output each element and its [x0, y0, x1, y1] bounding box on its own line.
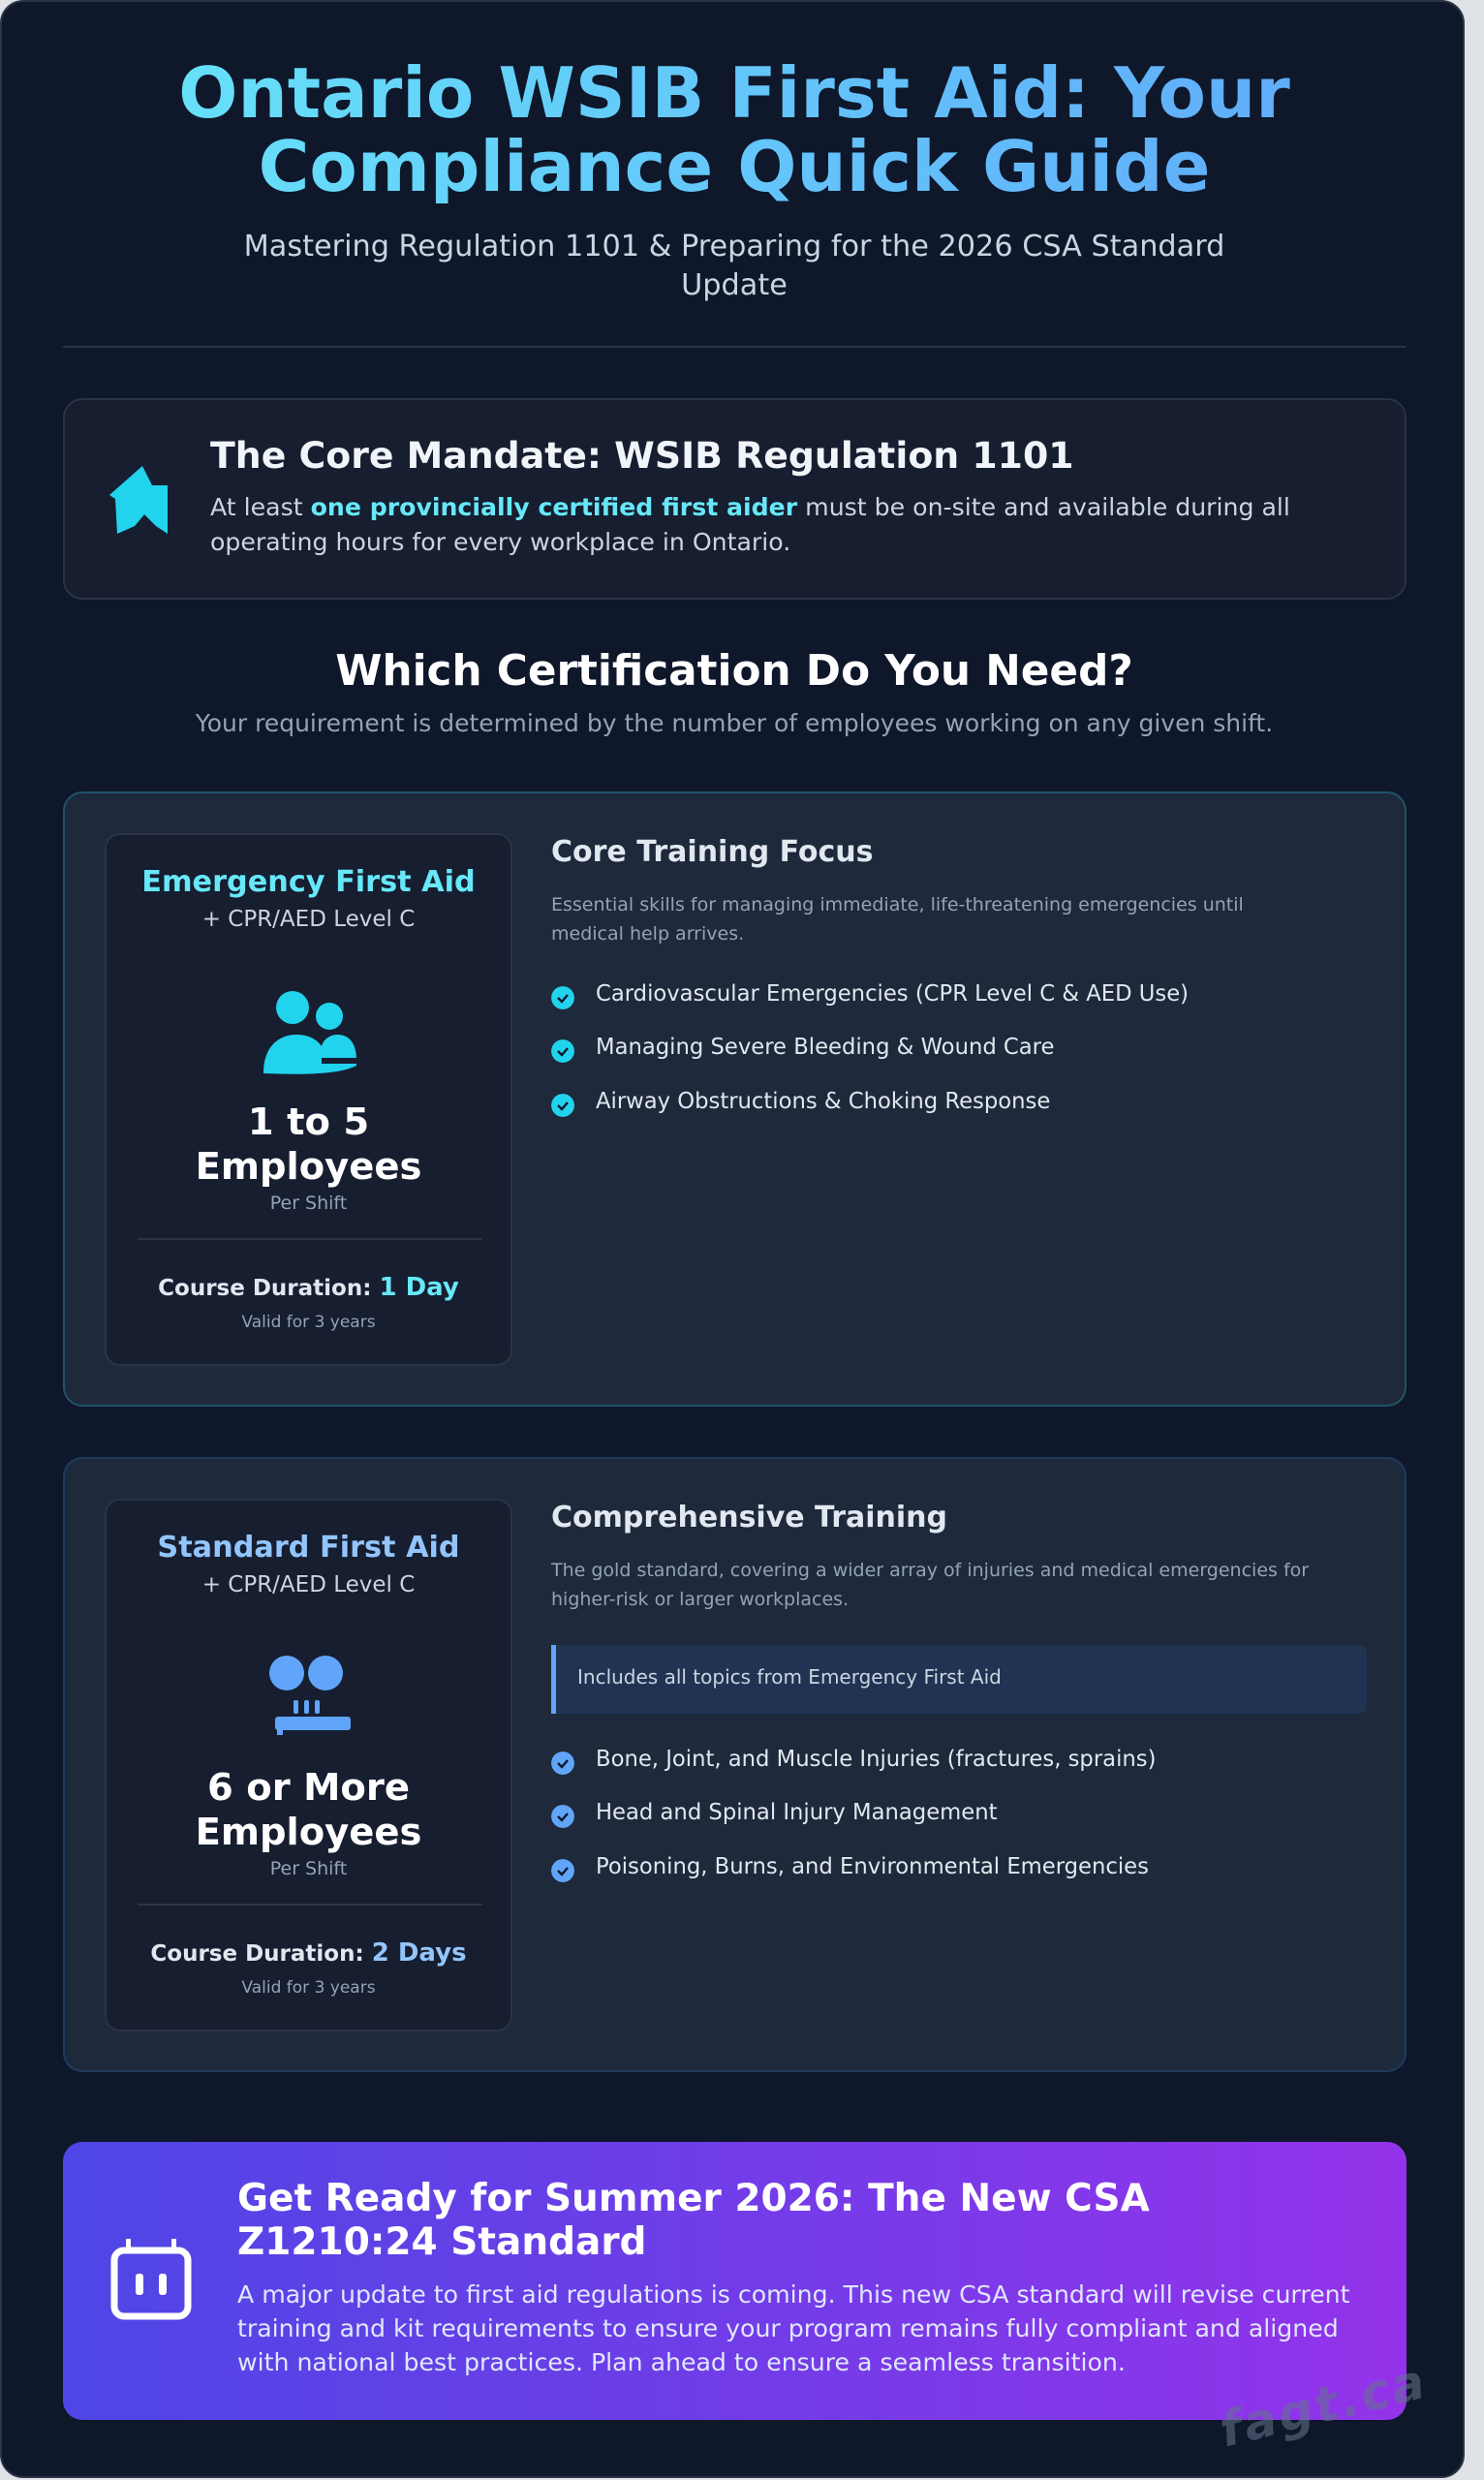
stat: 6 or more employees: Employees — [196, 1811, 421, 1854]
title — [2, 56, 1467, 203]
card: standard summary — [105, 1499, 512, 2031]
heading: which certification: Which Certification Do You Need? — [335, 646, 1133, 696]
icon: mandate — [109, 466, 168, 534]
title: Compliance Quick Guide — [259, 126, 1210, 207]
list: core topics: Managing Severe Bleeding & Wound Care — [596, 1035, 1054, 1060]
card: emergency summary: Per Shift — [270, 1193, 347, 1214]
callout: includes emergency topics — [551, 1645, 1367, 1714]
heading: core training focus: Core Training Focus — [551, 835, 874, 869]
heading: standard first aid: Standard First Aid — [157, 1531, 460, 1565]
heading: banner — [237, 2177, 1150, 2264]
list: core topics: Airway Obstructions & Choking Response — [596, 1089, 1050, 1114]
text: mandate body: At least one provincially certified first aider must be on-site and available during all operating hours for every workplace in Ontario. — [210, 493, 1290, 556]
stat: 1 to 5 employees — [196, 1100, 421, 1189]
text: course duration: Course Duration: 2 Days — [150, 1938, 467, 1968]
card: emergency summary: Valid for 3 years — [241, 1313, 376, 1332]
panel: emergency first aid — [63, 791, 1407, 1407]
text: comprehensive desc: The gold standard, covering a wider array of injuries and medical emergencies for higher-risk or larger workplaces. — [551, 1560, 1309, 1610]
heading: emergency first aid: Emergency First Aid — [141, 865, 476, 899]
list: core topics — [551, 981, 1189, 1117]
stat: 1 to 5 employees: 1 to 5 — [248, 1100, 369, 1144]
subtitle: Mastering Regulation 1101 & Preparing for the 2026 CSA Standard — [244, 230, 1224, 264]
card: emergency summary: + CPR/AED Level C — [202, 907, 415, 932]
subtitle — [244, 230, 1224, 302]
callout: includes emergency topics: Includes all topics from Emergency First Aid — [577, 1665, 1002, 1689]
heading: banner: Z1210:24 Standard — [237, 2220, 646, 2264]
list: comprehensive topics: Head and Spinal Injury Management — [596, 1800, 998, 1825]
text: core desc: Essential skills for managing immediate, life-threatening emergencies until medical help arrives. — [551, 894, 1244, 945]
list: core topics: Cardiovascular Emergencies (CPR Level C & AED Use) — [596, 981, 1189, 1007]
stat: 6 or more employees — [196, 1766, 421, 1854]
text: requirement note: Your requirement is determined by the number of employees working on any given shift. — [196, 709, 1273, 737]
heading: banner: Get Ready for Summer 2026: The New CSA — [237, 2177, 1150, 2220]
heading: core mandate: The Core Mandate: WSIB Regulation 1101 — [210, 434, 1074, 477]
card: standard summary: Valid for 3 years — [241, 1978, 376, 1998]
text: banner body: A major update to first aid regulations is coming. This new CSA standard will revise current training and kit requirements to ensure your program remains fully compliant and aligned with national best practices. Plan ahead to ensure a seamless transition. — [237, 2280, 1349, 2376]
banner: CSA 2026 — [63, 2142, 1407, 2420]
panel: core mandate — [63, 398, 1407, 600]
list: comprehensive topics: Poisoning, Burns, and Environmental Emergencies — [596, 1854, 1149, 1879]
card: emergency summary — [105, 833, 512, 1366]
panel: standard first aid — [63, 1457, 1407, 2072]
list: comprehensive topics — [551, 1747, 1156, 1882]
icon: calendar — [110, 2239, 192, 2319]
card: standard summary: Per Shift — [270, 1858, 347, 1879]
text: course duration: Course Duration: 1 Day — [158, 1273, 459, 1302]
stat: 6 or more employees: 6 or More — [207, 1766, 410, 1810]
list: comprehensive topics: Bone, Joint, and Muscle Injuries (fractures, sprains) — [596, 1747, 1156, 1772]
subtitle: Update — [681, 268, 788, 302]
heading: comprehensive training: Comprehensive Training — [551, 1501, 947, 1534]
watermark: fagt.ca — [1214, 2352, 1433, 2459]
title: Ontario WSIB First Aid: Your — [178, 52, 1290, 134]
icon: group — [269, 1656, 351, 1735]
icon: people — [263, 991, 356, 1074]
stat: 1 to 5 employees: Employees — [196, 1145, 421, 1189]
card: standard summary: + CPR/AED Level C — [202, 1572, 415, 1597]
